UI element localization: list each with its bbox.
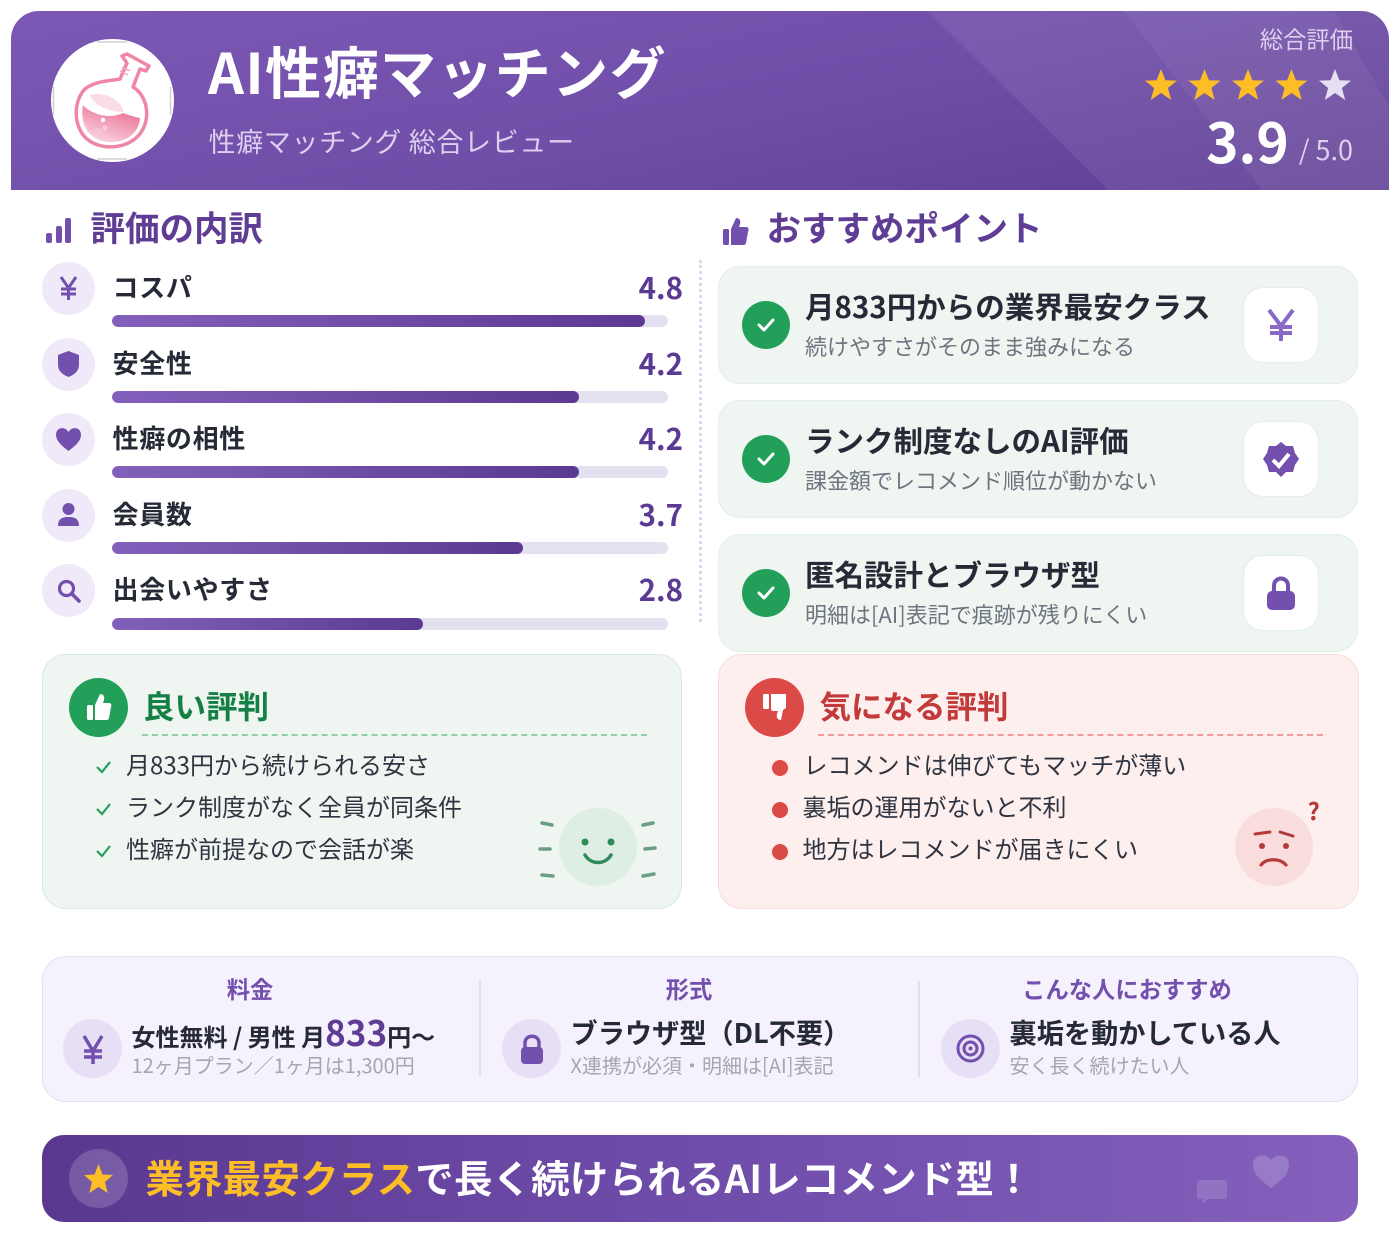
score: 3.9 / 5.0 [1206, 98, 1353, 178]
icon: smiling face [538, 808, 657, 886]
rating stars [1145, 69, 1351, 100]
info column: recommended for: こんな人におすすめ [1022, 971, 1232, 1005]
list [96, 746, 462, 865]
icon: worried face [1235, 792, 1320, 886]
heading: 良い評判 [143, 682, 269, 728]
info column: format: X連携が必須・明細は[AI]表記 [570, 1050, 834, 1079]
card: no rank system: 課金額でレコメンド順位が動かない [805, 464, 1157, 496]
icon: thumbs up [68, 678, 128, 736]
rating row: members: 3.7 [639, 493, 683, 535]
rating row: cost: 4.8 [639, 266, 683, 308]
header banner [11, 11, 1389, 190]
rating row: safety: 安全性 [112, 344, 193, 381]
list: 裏垢の運用がないと不利 [802, 788, 1066, 823]
rating row: cost [42, 262, 683, 315]
slogan: 業界最安クラスで長く続けられるAIレコメンド型！ [146, 1149, 1033, 1205]
card: cheapest class: 続けやすさがそのまま強みになる [805, 330, 1135, 362]
subtitle: 性癖マッチング 総合レビュー [208, 121, 575, 160]
title: AI性癖マッチング [208, 30, 667, 111]
rating row: compatibility: 4.2 [639, 417, 683, 459]
heading: 気になる評判 [820, 682, 1009, 728]
icon: verified badge tile [1243, 421, 1319, 497]
info column: recommended for: 裏垢を動かしている人 [1010, 1011, 1281, 1051]
icon: worried face: ? [1308, 792, 1320, 826]
panel: service info [42, 956, 1358, 1102]
check icon [742, 435, 790, 483]
info column: price: 女性無料 / 男性 月833円〜 [132, 1006, 435, 1056]
rating row: safety [42, 338, 683, 391]
panel: concerning reviews [718, 654, 1358, 909]
rating row: compatibility [42, 413, 683, 466]
card text: 月833円からの業界最安クラス [805, 284, 1211, 326]
rating row: cost: コスパ [112, 268, 193, 305]
list: ランク制度がなく全員が同条件 [126, 788, 462, 823]
info column: format [502, 971, 850, 1079]
check icon [742, 301, 790, 349]
logo: pink flask [51, 39, 174, 162]
rating row: compatibility: 性癖の相性 [112, 419, 246, 456]
icon: yen tile [1243, 287, 1319, 363]
panel: good reviews [42, 654, 682, 909]
icon: star [69, 1149, 128, 1208]
card: anonymous design: 明細は[AI]表記で痕跡が残りにくい [805, 598, 1147, 630]
heading: recommended points: おすすめポイント [766, 200, 1042, 250]
rating row: ease of meeting [42, 564, 683, 617]
list: 地方はレコメンドが届きにくい [802, 830, 1138, 865]
check icon [742, 569, 790, 617]
info column: price [63, 971, 435, 1079]
list: レコメンドは伸びてもマッチが薄い [804, 746, 1186, 781]
heading: rating breakdown: 評価の内訳 [90, 200, 263, 250]
icon: lock tile [1243, 555, 1319, 631]
card: anonymous design [718, 534, 1358, 652]
rating row: safety: 4.2 [639, 342, 683, 384]
decorative icons: heart and chat [1197, 1156, 1289, 1204]
info column: price: 料金 [227, 971, 273, 1005]
info column: format: ブラウザ型（DL不要） [570, 1011, 850, 1051]
rating row: members [42, 489, 683, 542]
info column: price: 12ヶ月プラン／1ヶ月は1,300円 [132, 1050, 415, 1079]
card text: 匿名設計とブラウザ型 [805, 552, 1100, 594]
list: 月833円から続けられる安さ [126, 746, 430, 781]
rating row: ease of meeting: 2.8 [639, 568, 683, 610]
rating row: ease of meeting: 出会いやすさ [112, 570, 273, 607]
overall label: 総合評価 [1260, 21, 1353, 55]
info column: recommended for: 安く長く続けたい人 [1010, 1050, 1190, 1079]
bottom banner [42, 1135, 1358, 1222]
icon: thumbs down [744, 678, 804, 736]
info column: format: 形式 [666, 971, 712, 1005]
card: cheapest class [718, 266, 1358, 384]
card text: ランク制度なしのAI評価 [805, 418, 1129, 460]
list: 性癖が前提なので会話が楽 [126, 830, 414, 865]
rating row: members: 会員数 [112, 495, 193, 532]
info column: recommended for [941, 971, 1281, 1079]
list [772, 746, 1186, 865]
card: no rank system [718, 400, 1358, 518]
